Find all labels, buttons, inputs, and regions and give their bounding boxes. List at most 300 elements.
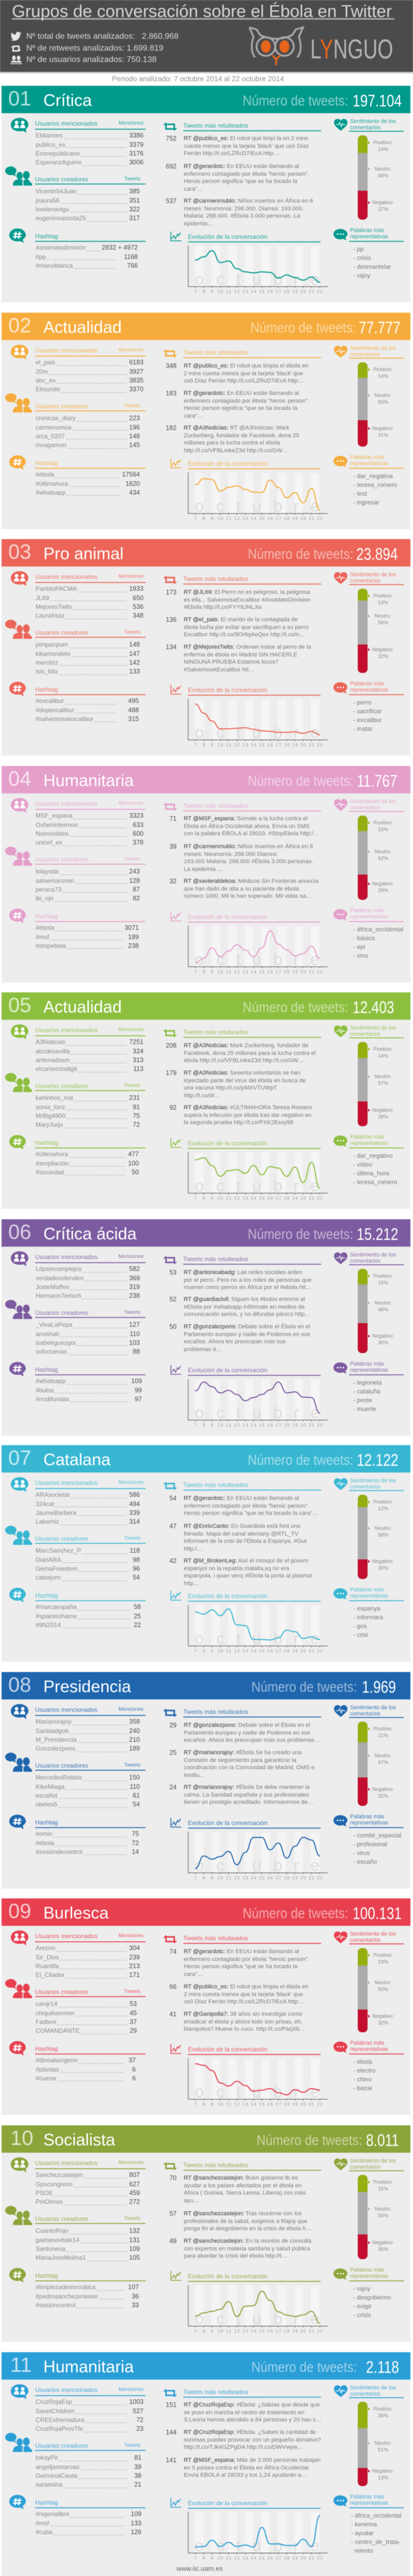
panel: tweets más retuiteados: cuesta menos que la tarjeta 'black' que usó Díaz [184,143,309,149]
panel: palabras representativas [333,1134,404,1186]
panel: palabras representativas: - última_hora [353,1169,389,1176]
panel: tweets más retuiteados: 53 [169,1269,177,1276]
panel: usuarios mencionados: 324cat [36,1500,54,1508]
panel: tweets más retuiteados: enfermero contagiado por ébola "heroic person". [184,398,309,404]
band: 10 [10,2127,33,2150]
panel: tweets más retuiteados: Zuckerberg, fundador de Facebook, dona 25 [184,432,299,438]
panel: usuarios creadores: 82 [133,895,140,902]
panel: usuarios mencionados: 633 [133,821,144,829]
panel: usuarios creadores: peraca73 [36,886,61,893]
panel: tweets más retuiteados: Tweets más retuiteados [183,1481,248,1489]
band: 08 [8,1674,31,1696]
band: Actualidad [43,318,122,336]
panel: hashtag: #ébola [36,471,54,478]
panel: hashtag: #últimahora [36,480,68,487]
panel: evolución de la conversación: octubre [195,1403,320,1422]
panel: usuarios creadores: 98 [133,1556,140,1563]
panel: tweets más retuiteados: la segunda prueba http://t.co/PXK2Esxy98 [184,1120,293,1126]
panel: usuarios creadores: Usuarios creadores [35,1082,88,1090]
panel: palabras representativas: miento [355,2547,373,2554]
panel: sentimiento: comentarios [350,1937,380,1943]
panel: palabras representativas: representativas [350,1367,388,1373]
panel: sentimiento: Negativo: [372,426,394,432]
panel: usuarios creadores: 87 [133,886,140,893]
panel: evolución de la conversación: Evolución de la conversación [188,233,267,240]
panel: palabras representativas: representativas [350,2046,388,2052]
panel: tweets más retuiteados: 47 [169,1523,177,1530]
band [2,992,410,1020]
panel: hashtag: 189 [128,933,139,941]
panel: sentimiento: Positivo: [373,820,393,826]
panel: usuarios mencionados: 3379 [129,141,144,148]
panel: palabras representativas: - virus [353,1849,370,1857]
panel: usuarios mencionados: 807 [129,2171,140,2179]
section 10 Socialista [2,2125,410,2342]
panel: usuarios creadores: 145 [129,441,140,449]
panel: usuarios mencionados: 459 [129,2189,140,2197]
panel: sentimiento: comentarios [350,1484,380,1490]
panel: tweets más retuiteados: RT @antonioabadg: Las redes sociales arden [184,1269,303,1276]
panel: tweets más retuiteados: usó Díaz Ferrán http://t.co/LZRcD7IEcA http:… [184,378,305,384]
panel: usuarios creadores: Usuarios creadores [35,1535,88,1542]
band: 15.212 [357,1225,399,1244]
panel: usuarios mencionados: 238 [129,1292,140,1299]
panel: tweets más retuiteados: 42 [169,1557,177,1565]
panel: usuarios creadores: _VivaLaPepa [36,1321,72,1328]
panel: tweets más retuiteados: Tweets más retuiteados [183,349,248,356]
panel: tweets más retuiteados: 141 [166,2457,177,2464]
band [2,1445,410,1473]
panel: tweets más retuiteados: NINGUNA PRUEBA Estamos locos? [184,659,278,665]
panel: usuarios mencionados [10,571,146,619]
panel: hashtag: 434 [129,489,140,496]
panel: usuarios mencionados [8,2383,147,2435]
panel: palabras representativas: Palabras más [350,227,384,234]
panel: tweets más retuiteados: 52 [169,1296,177,1303]
panel: usuarios mencionados: 23 [136,2425,144,2432]
panel: evolución de la conversación: 78910111213141516171819202122 [194,2328,323,2334]
panel: usuarios mencionados: Menciones [119,801,144,806]
panel: sentimiento: comentarios [350,1711,380,1717]
panel: tweets más retuiteados: cara"… [184,1971,203,1977]
panel: hashtag: 238 [128,942,139,949]
panel: usuarios creadores: 75 [133,1112,140,1120]
panel: usuarios creadores: MercedesRoldos [36,1774,82,1781]
panel: usuarios creadores: 29 [130,2027,137,2034]
panel: hashtag: #sociedad [36,1169,64,1176]
panel: hashtag: 25 [134,1613,141,1620]
panel: usuarios creadores: 54 [133,1574,140,1581]
panel: hashtag: #bulos [36,1387,54,1394]
panel: sentimiento: Sentimiento de los [350,2158,396,2164]
panel: tweets más retuiteados: mueren como perros en África por el #ebola htt… [184,1284,311,1291]
panel: hashtag: #pedrosanchezeniaser [36,2293,98,2300]
panel: tweets más retuiteados: RT @carmenrnublo: Niños muertos en África en 6 [184,844,313,850]
panel: usuarios mencionados: Elmundo [36,386,60,393]
panel: sentimiento: Positivo: [373,367,393,373]
panel: sentimiento: Negativo: [372,1559,394,1565]
panel: usuarios creadores: 37 [130,2018,137,2026]
panel: palabras representativas: - dar_negativa [353,472,393,480]
panel: evolución de la conversación: Evolución de la conversación [188,1140,267,1147]
panel: sentimiento: Neutro: [375,1980,391,1986]
panel: evolución de la conversación: Evolución de la conversación [188,2046,267,2053]
panel: hashtag: #stopebola [36,942,66,949]
panel: tweets más retuiteados: 134 [166,643,177,651]
panel: tweets más retuiteados: 66 [169,1983,177,1990]
panel: hashtag: Hashtag [35,686,58,693]
panel: evolución de la conversación: octubre [195,1629,320,1648]
panel: tweets más retuiteados: 74 [169,1948,177,1955]
panel: tweets más retuiteados: RT @sanchezcastejon: Buen gobierno tb es [184,2175,298,2181]
panel: tweets más retuiteados: 54 [169,1495,177,1502]
panel: palabras representativas: Palabras más [350,1814,384,1820]
panel: usuarios creadores: Tweets [124,1083,140,1088]
panel: sentimiento [333,1251,405,1355]
panel: tweets más retuiteados: cara"… [184,412,203,419]
panel: usuarios creadores [4,1299,147,1356]
panel: usuarios creadores: 39 [134,2463,141,2471]
panel: palabras representativas: - centro_de_trata- [351,2538,400,2545]
panel: hashtag: Hashtag [35,233,58,240]
panel: hashtag: 488 [128,707,139,714]
panel: palabras representativas: - gos [353,1622,367,1629]
panel: usuarios creadores: 54 [133,1801,140,1808]
panel: usuarios mencionados: 3386 [129,132,144,139]
panel: evolución de la conversación: 78910111213141516171819202122 [194,516,323,521]
panel: hashtag: Hashtag [35,1139,58,1146]
band: 04 [8,768,31,790]
panel: usuarios creadores: Fadteni [36,2018,56,2026]
panel: tweets más retuiteados: 537 [166,197,177,205]
band: 09 [8,1900,31,1923]
panel: usuarios creadores: cronicas_diary [36,415,75,422]
panel: usuarios mencionados: 171 [129,1971,140,1979]
panel: usuarios creadores [4,2205,147,2262]
panel: usuarios mencionados [10,117,146,166]
panel: usuarios creadores: 231 [129,1094,140,1101]
panel: evolución de la conversación: octubre [195,1176,320,1195]
panel: evolución de la conversación: 78910111213141516171819202122 [194,289,323,294]
band: 03 [8,541,31,563]
panel: tweets más retuiteados: http:/… [184,1545,202,1552]
panel: sentimiento: Neutro: [375,2206,391,2212]
panel: tweets más retuiteados: 49 [169,2237,177,2245]
panel: tweets más retuiteados: número 1000. Mil le han superado. Mil vidas sa… [184,893,312,899]
panel: evolución de la conversación [170,458,328,521]
panel: evolución de la conversación: Evolución de la conversación [188,913,267,921]
panel: usuarios mencionados: Menciones [119,347,144,353]
band: Número de tweets: [243,1905,348,1921]
panel: usuarios creadores: 88 [133,1348,140,1355]
panel: usuarios mencionados: JaumeBarbera [36,1509,76,1516]
panel: hashtag: 1620 [125,480,140,487]
panel: usuarios mencionados: 319 [129,1283,140,1291]
panel: evolución de la conversación: Evolución de la conversación [188,686,267,694]
band: Número de tweets: [251,1679,357,1695]
section 07 Catalana [2,1445,410,1662]
panel: hashtag: 37 [129,2057,136,2064]
panel: sentimiento: Negativo: [372,1108,394,1113]
section 11 Humanitaria [2,2352,410,2576]
panel: tweets más retuiteados: cara"… [184,186,203,192]
panel: usuarios creadores: Tweets [124,1989,140,1995]
panel: sentimiento: Positivo: [373,140,393,146]
logo wordmark: LYNGUO [310,34,393,65]
panel: palabras representativas [333,2267,405,2325]
band: 197.104 [353,91,402,110]
panel: usuarios mencionados: elcomerciodigit [36,1065,77,1072]
panel: sentimiento: comentarios [350,805,380,811]
panel: tweets más retuiteados: 752 [166,135,177,142]
panel: usuarios creadores: Tweets [124,1310,140,1315]
panel: palabras representativas [333,681,404,732]
panel: tweets más retuiteados: 32 [169,878,177,885]
panel: usuarios mencionados: Menciones [119,1254,144,1260]
panel: hashtag: 6 [132,2075,136,2082]
panel: usuarios creadores: jsaura56 [36,197,59,204]
panel: sentimiento: Sentimiento de los [350,1931,396,1937]
panel: tweets más retuiteados: se puso en marcha el centro de tratamiento en [184,2410,305,2416]
panel: usuarios creadores: Santonesa [36,2245,65,2252]
panel: tweets más retuiteados: por el perro. Pero no a los miles de personas que [184,1277,311,1283]
panel: sentimiento: Sentimiento de los [350,345,396,351]
panel: sentimiento: Positivo: [373,2406,393,2412]
panel: tweets más retuiteados: RT @MSF_espana: Súmate a la lucha contra el [184,816,308,822]
panel: evolución de la conversación: octubre [195,1856,320,1875]
band [2,766,410,793]
panel: tweets más retuiteados: RT @publico_es: El robot que limpia el ébola en [184,363,309,369]
panel: usuarios mencionados: 6183 [129,359,144,366]
panel: tweets más retuiteados: #Ebola http://t.co/FYY6JNLJia [184,604,262,610]
panel: usuarios mencionados: 240 [129,1727,140,1735]
panel: usuarios creadores: kikamondelo [36,650,70,657]
panel: palabras representativas [333,908,404,959]
panel: usuarios creadores: COMANDANTE [36,2027,80,2034]
panel: palabras representativas [333,1361,405,1419]
panel: tweets más retuiteados: 70 [169,2174,177,2182]
band: 11 [10,2354,32,2376]
panel: sentimiento [333,345,404,447]
panel: palabras representativas: - cataluña [353,1387,380,1394]
panel: usuarios mencionados: 324 [133,1048,144,1055]
panel: tweets más retuiteados: que han dado de alta a su paciente de ébola [184,886,299,892]
panel: tweets más retuiteados: una vacuna http://t.co/pMXVTUWpT [184,1085,277,1091]
panel: tweets más retuiteados: RT @gerardotc: En EEUU están llamando al [184,163,299,170]
panel: sentimiento: 50% [378,2213,388,2219]
panel: hashtag: #pp [36,253,46,260]
panel: usuarios mencionados: 650 [133,594,144,602]
panel: usuarios mencionados: unicef_es [36,839,62,846]
panel: tweets más retuiteados: 71 [169,815,177,822]
section 02 Actualidad [2,313,410,529]
panel: tweets más retuiteados: RT @gonzalezpons: Debate sobre el Ébola en el [184,1722,310,1728]
panel: evolución de la conversación: octubre [195,950,320,969]
panel: sentimiento: Sentimiento de los [350,2385,396,2391]
panel: sentimiento: Neutro: [375,1300,391,1306]
panel: usuarios creadores [5,166,146,222]
panel: usuarios creadores: lolayoda [36,868,59,875]
panel: usuarios creadores: 132 [129,2227,140,2234]
panel: tweets más retuiteados: Heroic person significa "que se ha tocado la [184,405,297,411]
panel: tweets más retuiteados: erradicar el ébola y ahora todo son prisas, eh, [184,2019,303,2025]
panel: usuarios mencionados: verdadesofenden [36,1275,84,1282]
band [2,1898,410,1926]
panel: tweets más retuiteados: http://t.co/VFBLmkeZ3d http://t.co/GW… [184,448,288,454]
panel: hashtag: 97 [135,1396,142,1403]
panel: usuarios mencionados: Usuarios mencionados [35,1479,98,1486]
panel: tweets más retuiteados: RT @xavieraldekoa: Médicos Sin Fronteras anuncia [184,878,319,884]
panel: usuarios creadores: GemaFreedom [36,1565,77,1572]
panel: tweets más retuiteados: Ferrán http://t.co/LZRcD7IEcA http:… [184,150,280,157]
panel: usuarios creadores: 81 [134,2454,141,2461]
panel: sentimiento: Positivo: [373,1499,393,1505]
panel: usuarios creadores: 322 [129,206,140,213]
panel: usuarios mencionados: Oxfamintermon [36,821,78,829]
panel: palabras representativas: - escaño [353,1858,377,1865]
panel: usuarios mencionados [8,1929,147,1981]
panel: tweets más retuiteados: Tweets más retuiteados [183,1708,248,1715]
section 01 Crítica [2,86,410,302]
panel: tweets más retuiteados: RT @gonzalezpons: Debate sobre el Ébola en el [184,1324,310,1330]
panel: usuarios creadores: angeljasmaroas [36,2463,80,2471]
panel: usuarios mencionados: 272 [129,2198,140,2205]
panel: usuarios mencionados: 527 [133,2408,144,2415]
panel: sentimiento: Negativo: [372,1787,394,1792]
panel: palabras representativas: representativas [350,1819,388,1826]
panel: tweets más retuiteados: 208 [166,1042,177,1049]
panel: hashtag: #depexcalibur [36,707,74,714]
panel: usuarios creadores: 105 [129,2254,140,2261]
panel: palabras representativas: Palabras más [350,681,384,687]
band: Número de tweets: [248,546,353,562]
panel: tweets más retuiteados: con la palabra EBOLA al 28033. #StopEbola http:/… [184,831,319,837]
panel: usuarios mencionados: Ldpsincomplejos [36,1265,82,1272]
panel: usuarios creadores: Usuarios creadores [35,2442,88,2449]
panel: evolución de la conversación [170,684,328,747]
panel: usuarios mencionados: 3927 [129,368,144,375]
panel: usuarios creadores: 142 [129,659,140,666]
panel: tweets más retuiteados: ayu… [184,2198,199,2204]
panel: hashtag: #dinoalaxígeno [36,2057,77,2064]
panel: tweets más retuiteados: enferma de ébola en Madrid SIN HACERLE [184,651,297,657]
panel: usuarios creadores: obeles5 [36,1801,57,1808]
panel: usuarios mencionados: CruzRojaEsp [36,2398,72,2405]
panel: palabras representativas: - epi [353,943,365,950]
panel: hashtag: 495 [128,697,139,704]
panel: usuarios creadores: Usuarios creadores [35,176,88,183]
panel: usuarios creadores: 72 [133,1121,140,1128]
panel: tweets más retuiteados: 348 [166,362,177,370]
panel: usuarios mencionados: Menciones [119,574,144,579]
panel: sentimiento: 16% [378,827,388,833]
panel: usuarios mencionados [8,1703,147,1755]
panel: tweets más retuiteados: Tweets más retuiteados [183,575,248,582]
panel: hashtag: 22 [134,1621,141,1629]
band: Número de tweets: [248,1226,353,1242]
panel: sentimiento: 29% [378,888,388,894]
panel: tweets más retuiteados: Excalibur http://t.co/9OrltqAeQex http://t.co/n… [184,632,305,638]
panel: tweets más retuiteados: http… [184,1581,199,1587]
panel: sentimiento: Positivo: [373,1726,393,1732]
panel: usuarios creadores: CuantoRojo [36,2227,68,2234]
panel: hashtag [9,681,146,723]
panel: usuarios mencionados: 1003 [129,2398,144,2405]
panel: usuarios mencionados: 3176 [129,150,144,157]
panel: palabras representativas: Palabras más [350,2267,384,2273]
panel: usuarios mencionados: Usuarios mencionados [35,120,98,127]
panel: tweets más retuiteados: RT @A3Noticias: #ÚLTIMAHORA Teresa Romero [184,1105,312,1111]
panel: tweets más retuiteados: RT @M_BrokenLeg: Així el mosquí de el govern [184,1558,309,1564]
panel: palabras representativas [333,2041,405,2098]
panel: tweets más retuiteados [163,1707,323,1813]
panel: tweets más retuiteados: Tweets más retuiteados [183,802,248,809]
panel: palabras representativas: - áfrica_occidental [351,2512,401,2519]
panel: usuarios mencionados: abcdesevilla [36,1048,70,1055]
panel: evolución de la conversación: 78910111213141516171819202122 [194,1648,323,1653]
panel: usuarios mencionados [10,1024,146,1073]
panel: usuarios mencionados: ARAsocietat [36,1491,70,1498]
panel: sentimiento: 56% [378,620,388,626]
panel: usuarios creadores: Usuarios creadores [35,1762,88,1769]
panel: tweets más retuiteados: RT @EnricCanto: En Guardiola està font una [184,1523,300,1529]
panel: hashtag: #cuerar [36,2075,57,2082]
header panel [0,0,413,73]
panel: usuarios creadores: 196 [129,424,140,431]
band: Número de tweets: [248,1452,353,1468]
panel: palabras representativas: - áfrica_occidental [353,925,403,932]
panel: palabras representativas: - crisis [353,2311,371,2319]
panel: palabras representativas: - ingresar [353,498,379,505]
panel: hashtag: #whatsapp [36,1377,66,1385]
panel: tweets más retuiteados: 173 [166,589,177,596]
band: 1.969 [362,1678,396,1696]
panel: usuarios creadores: tki_ojo [36,895,54,902]
panel: usuarios creadores: Usuarios creadores [35,403,88,410]
panel: hashtag [9,1134,146,1176]
band: 77.777 [359,318,401,337]
panel: palabras representativas: - profesional [353,1840,387,1847]
panel: evolución de la conversación [170,912,328,974]
band: 2.118 [366,2358,399,2376]
panel: usuarios creadores: saraesina [36,2481,62,2488]
panel: usuarios creadores: karlinhos_rod [36,1094,73,1101]
panel: hashtag: Hashtag [35,1819,58,1826]
panel: usuarios mencionados: Sir_Dios [36,1954,59,1961]
panel: usuarios creadores: chiquihammer [36,2010,74,2017]
panel: sentimiento: Sentimiento de los [350,118,396,125]
panel: usuarios mencionados: Usuarios mencionados [35,573,98,580]
panel: hashtag: 75 [132,1830,139,1837]
panel: usuarios mencionados: Gonzalezpons [36,1745,75,1752]
band: 02 [8,314,31,337]
panel: tweets más retuiteados: escaños. Ahora les preocupan más sus [184,1339,285,1345]
band: 01 [8,87,31,110]
panel: tweets más retuiteados: Malaria: 268.000. #Ébola 3.000 personas. La [184,213,300,219]
panel: tweets más retuiteados: RT @gerardotc: En EEUU están llamando al [184,1495,299,1501]
panel: palabras representativas: - sacrificar [353,707,382,714]
panel: hashtag: #ampliación [36,1160,69,1167]
panel: hashtag: #omin [36,1830,53,1837]
panel: usuarios creadores: Tweets [124,176,140,182]
panel: hashtag: 107 [128,2283,139,2291]
panel: sentimiento [333,2384,405,2488]
panel: usuarios creadores: 110 [130,1330,140,1338]
panel: hashtag: #manoblanca [36,262,73,269]
panel: sentimiento: Neutro: [375,393,391,398]
panel: usuarios mencionados: PartidoPACMA [36,585,77,592]
panel: palabras representativas: - perro [353,699,371,706]
